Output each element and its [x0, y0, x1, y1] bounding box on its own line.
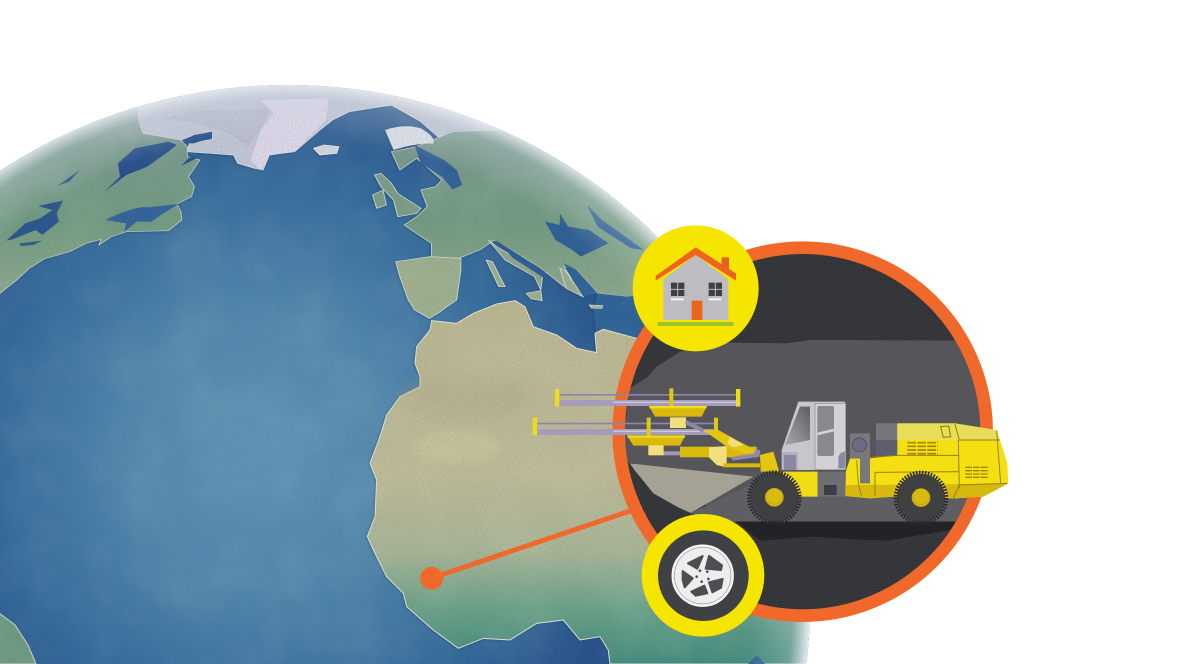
Caspian sea — [587, 205, 644, 250]
house badge — [633, 225, 759, 351]
roof — [656, 247, 736, 281]
Great Britain — [375, 173, 421, 217]
Iceland — [314, 145, 339, 155]
Africa — [367, 301, 817, 664]
Europe — [390, 130, 658, 298]
tunnel scene — [620, 340, 987, 541]
rim ring — [674, 547, 731, 604]
Aegean island — [589, 305, 603, 308]
drill rig — [533, 388, 1008, 523]
Iberia — [396, 257, 461, 318]
ocean — [0, 70, 830, 664]
wheel badge — [642, 514, 764, 637]
Africa landmass — [367, 301, 817, 664]
road — [690, 483, 987, 522]
connector line — [432, 511, 630, 578]
slim lake — [57, 170, 80, 186]
orange ring — [619, 248, 987, 616]
Atmospheric rim — [0, 70, 830, 664]
right window — [709, 283, 722, 300]
upper drill rods — [555, 388, 740, 417]
cab — [782, 402, 846, 470]
rock pile left — [620, 462, 692, 540]
magnified circle with drill rig — [533, 225, 1008, 637]
Black Sea — [545, 213, 608, 257]
rim — [672, 545, 733, 606]
South America — [0, 610, 36, 664]
northern land masses — [0, 85, 658, 338]
Greenland grey shading — [222, 126, 260, 146]
tyre — [658, 530, 749, 621]
Gulf of St Lawrence — [105, 204, 179, 232]
lower drill rods — [533, 418, 718, 446]
Balkan strip — [560, 268, 583, 297]
Grain — [0, 70, 830, 664]
Mediterranean island — [486, 260, 505, 287]
Sahara shading — [395, 374, 420, 402]
rim windows — [683, 556, 723, 596]
house wall — [663, 255, 728, 320]
Aegean strip — [564, 263, 598, 297]
tunnel wall — [620, 340, 987, 522]
polar ice and haze — [138, 85, 498, 171]
Italy — [488, 240, 543, 290]
chassis grille — [824, 485, 837, 495]
dark floor band — [737, 522, 957, 541]
left window — [671, 283, 684, 300]
icon: house — [633, 225, 759, 351]
rock background — [625, 254, 981, 610]
boom arm — [648, 417, 779, 472]
main body yellow — [845, 423, 1008, 498]
Baltic Sea — [415, 145, 462, 189]
rear wheel — [896, 473, 946, 523]
tunnel floor wedge — [628, 463, 753, 513]
eastern Mediterranean — [593, 293, 690, 347]
small lake — [19, 241, 42, 246]
wheel bolts — [695, 569, 710, 583]
North America — [0, 67, 200, 300]
engine block — [850, 423, 898, 483]
connector line and location dot — [420, 511, 630, 590]
Labrador inlet — [181, 157, 200, 166]
Paper texture — [5, 116, 760, 664]
door — [692, 301, 702, 320]
Eastern Atlantic inlet — [748, 655, 765, 664]
Italian coastal water — [495, 239, 547, 280]
ground — [657, 322, 734, 326]
infographic illustration — [0, 85, 1008, 664]
location dot — [420, 567, 443, 590]
Ireland — [372, 190, 386, 208]
Great Lakes — [6, 201, 63, 241]
Arctic bay — [183, 132, 213, 143]
globe — [0, 67, 830, 664]
island south of Italy — [526, 291, 542, 301]
chimney — [722, 257, 729, 271]
Greenland ice cap — [250, 98, 328, 170]
icon: wheel — [642, 514, 764, 637]
front body — [780, 472, 818, 497]
chassis centre — [818, 472, 846, 497]
northern ice — [385, 126, 434, 150]
central Sahara highlight — [420, 434, 494, 458]
front wheel — [749, 472, 800, 523]
Hudson Bay — [104, 142, 177, 192]
